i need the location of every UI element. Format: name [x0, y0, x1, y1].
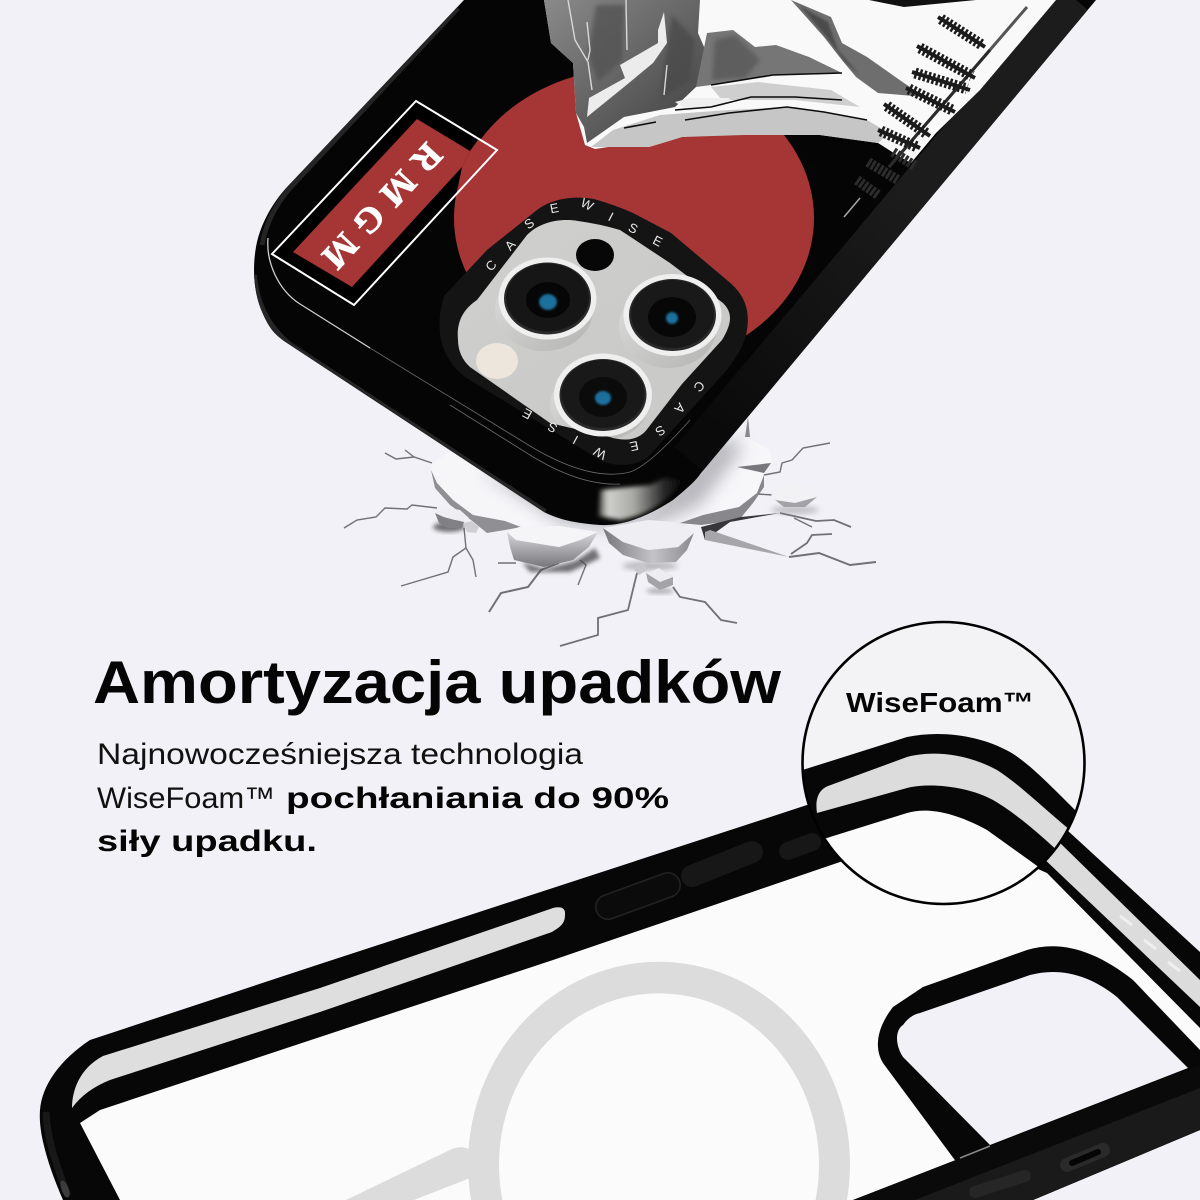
camera lens: right	[619, 274, 722, 368]
side button: lower right	[975, 1150, 1103, 1192]
side band highlights	[254, 0, 1076, 520]
magnifier label: WiseFoam™	[846, 687, 1034, 718]
lower frame edge	[853, 1065, 1200, 1200]
camera lidar hole	[576, 239, 614, 271]
case outer body	[254, 0, 1096, 525]
rim hairline	[268, 238, 370, 348]
CASEWISE ring text: upper: CASEWISE	[486, 198, 663, 270]
magnifier callout: WiseFoam	[790, 622, 1090, 915]
heading: Amortyzacja upadków	[93, 649, 781, 716]
rock chunk: right	[771, 485, 817, 507]
artwork: red sun	[454, 68, 814, 368]
magnifier outline	[802, 622, 1084, 904]
clear back panel	[80, 830, 1200, 1200]
camera flash	[476, 343, 518, 379]
body text	[97, 738, 669, 858]
CASEWISE ring text: lower: CASEWISE	[522, 382, 704, 460]
body text: siły upadku.	[97, 825, 317, 858]
printed label glyphs: RMGM	[314, 135, 450, 277]
broken slab: upper left	[431, 440, 560, 533]
artwork: pine trees	[844, 7, 1027, 217]
camera bump ring	[439, 198, 748, 465]
rim fine lines	[370, 348, 690, 484]
magnet alignment bar	[346, 1147, 479, 1200]
rock chunk: left	[435, 507, 479, 533]
camera lens: top left	[495, 258, 596, 351]
illustration: cracked ground	[344, 417, 876, 646]
camera lens: bottom	[550, 354, 652, 441]
crack lines	[344, 443, 876, 646]
foam strip streaks	[1120, 916, 1180, 971]
rock chunks: lower small	[632, 563, 673, 590]
broken slab: upper right	[640, 417, 789, 557]
black frame	[40, 767, 1200, 1200]
printed label box	[272, 101, 497, 305]
magnified frame corner	[804, 734, 1075, 866]
lower frame sheen	[915, 1088, 1200, 1200]
rock chunk: centre left	[507, 526, 598, 567]
camera cut-out rim	[878, 946, 1200, 1167]
grey foam strip: right	[1040, 838, 1200, 1007]
camera cut-out opening	[897, 972, 1188, 1145]
silver camera plate	[458, 220, 730, 440]
magnet ring	[468, 962, 850, 1200]
contact shadows	[433, 506, 819, 594]
top phone with printed case	[254, 0, 1096, 526]
rock chunk: centre right	[603, 520, 694, 563]
side hole: left	[59, 1179, 71, 1199]
magnifier lens fill	[802, 622, 1084, 904]
side buttons: volume and action	[608, 842, 812, 907]
body text: pochłaniania do 90%	[286, 782, 669, 815]
body text: Najnowocześniejsza technologia	[97, 738, 583, 771]
bottom case: clear back with black frame	[40, 767, 1200, 1200]
shade cast by phone	[480, 440, 745, 532]
body text: WiseFoam™	[97, 782, 275, 815]
frame sheen lines	[46, 1112, 990, 1196]
grey foam strip: left	[72, 907, 565, 1108]
artwork: ink mountain	[544, 0, 1056, 163]
